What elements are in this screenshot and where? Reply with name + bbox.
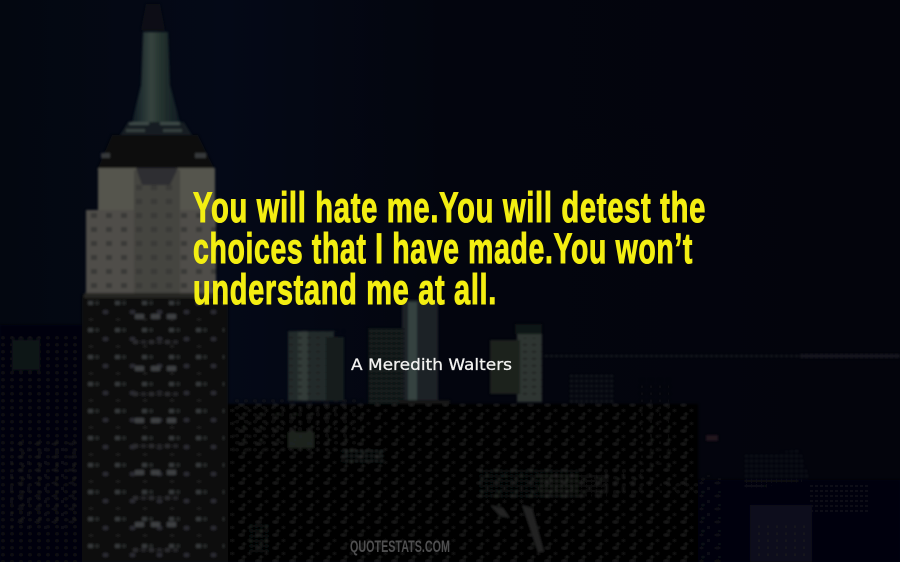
quote text — [193, 184, 706, 314]
building: skyscraper lower shaft with windows — [82, 293, 228, 562]
lower right city — [660, 435, 900, 562]
watermark: QUOTESTATS.COM — [350, 537, 450, 556]
author: A Meredith Walters — [351, 355, 512, 374]
building: left distant blocks — [0, 325, 85, 562]
building: skyscraper lit crown — [86, 168, 216, 295]
quote line 3: understand me at all. — [193, 266, 497, 314]
distant shoreline lights — [545, 352, 900, 470]
building: twin pale towers — [288, 331, 344, 401]
building: grid block — [568, 375, 614, 431]
building: central tall tower — [368, 300, 450, 425]
building: right pale tower — [490, 324, 542, 402]
lower city blocks — [228, 396, 698, 562]
building: skyscraper spire — [97, 4, 215, 170]
